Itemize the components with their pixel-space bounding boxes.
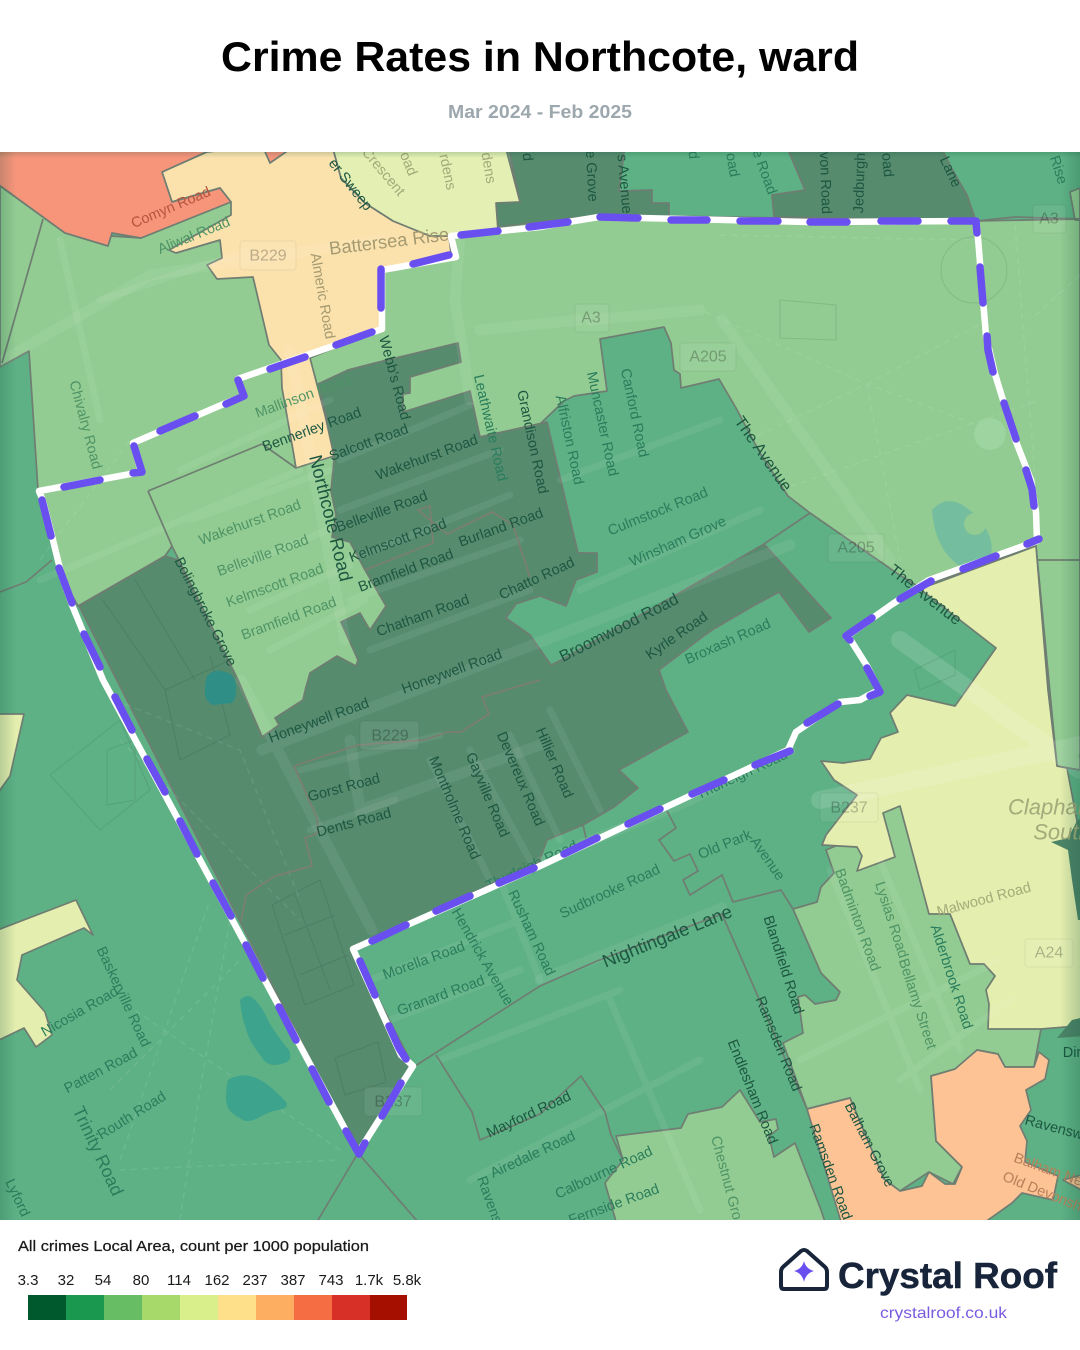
street name labels: Blandfield Road (760, 914, 806, 1016)
street name labels: Nicosia Road (39, 984, 121, 1040)
subtitle: date range: Mar 2024 - Feb 2025 (448, 101, 632, 122)
street name labels: Comyn Road (129, 184, 213, 232)
street name labels: Rise (1046, 154, 1070, 186)
area: pale yellow zones (0, 145, 1080, 1047)
street name labels: Northcote Road (305, 453, 357, 583)
street name labels: Winsham Grove (627, 514, 729, 570)
street name labels: The Avenue (731, 413, 795, 495)
legend value labels: 54 (95, 1272, 111, 1289)
road number signs: B237 (374, 1094, 412, 1110)
street name labels: s Avenue (613, 154, 635, 214)
legend value labels: 80 (133, 1272, 149, 1289)
street name labels: Kyrle Road (643, 609, 711, 663)
legend value labels: 237 (242, 1272, 268, 1289)
legend value labels: 162 (204, 1272, 230, 1289)
street name labels: Nightingale Lane (599, 900, 735, 972)
area: dark green lowest-crime zones (79, 145, 976, 1153)
street name labels: Chatto Road (497, 555, 577, 603)
street name labels: Endlesham Road (724, 1037, 780, 1147)
street name labels: Ravens (473, 1174, 505, 1226)
street name labels: rdens (435, 153, 459, 191)
street name labels: Montholme Road (425, 754, 483, 862)
street name labels: Alfriston Road (552, 394, 586, 486)
street name labels: Baskerville Road (93, 944, 153, 1050)
street name labels: Chivalry Road (65, 379, 105, 471)
street name labels: Wakehurst Road (197, 497, 303, 549)
street name labels: Trinity Road (69, 1103, 127, 1199)
street name labels: Chestnut Gro (707, 1134, 745, 1222)
street name labels: oad (396, 150, 420, 178)
road number signs: A205 (689, 348, 727, 366)
street name labels: Wakehurst Road (374, 432, 480, 484)
ward boundary: white line with purple dashes (39, 217, 1039, 1154)
street name labels: Bolingbroke Grove (171, 555, 239, 669)
street name labels: The Avenue (885, 561, 965, 629)
road network (0, 235, 1080, 1210)
street name labels: Balham Grove (841, 1100, 897, 1190)
ponds (205, 418, 1006, 1121)
road number signs: A24 (1035, 944, 1063, 962)
website: crystalroof.co.uk (880, 1305, 1008, 1322)
street name labels: Lyford (1, 1177, 33, 1219)
street name labels: Mallinson Road (253, 372, 353, 422)
street name labels: Honeywell Road (400, 646, 504, 698)
street name labels: Culmstock Road (606, 485, 710, 539)
road number signs: B229 (249, 248, 287, 264)
street name labels: er Sweep (325, 156, 375, 214)
legend value labels: 32 (58, 1272, 74, 1289)
street name labels: Canford Road (617, 367, 651, 459)
street name labels: Ramsden Road (752, 994, 804, 1094)
street name labels: Avenue (746, 834, 788, 884)
street name labels: Kelmscott Road (347, 516, 449, 566)
street name labels: Kelmscott Road (224, 561, 326, 611)
street name labels: Hillier Road (532, 725, 576, 801)
street name labels: Granard Road (395, 973, 487, 1019)
street name labels: von Road (816, 152, 834, 214)
street name labels: Jedburgh (851, 153, 869, 213)
street name labels: Alderbrook Road (927, 923, 975, 1031)
street name labels: Calbourne Road (553, 1143, 655, 1203)
street name labels: Crescent (358, 145, 408, 199)
street name labels: Hendrick Avenue (448, 906, 516, 1008)
internal boundary lines (0, 217, 1080, 1230)
street name labels: e Road (748, 147, 780, 197)
area: peach higher-crime zones (807, 1050, 1080, 1225)
street name labels: Burland Road (457, 505, 545, 551)
edge vignette (0, 152, 1080, 1220)
legend title: All crimes Local Area, count per 1000 population (18, 1238, 369, 1255)
road number signs: B237 (830, 800, 868, 816)
street name labels: d (519, 152, 535, 162)
street name labels: Mayford Road (484, 1089, 574, 1141)
street name labels: Gorst Road (306, 771, 382, 805)
street name labels: d (685, 150, 701, 160)
legend value labels: 3.3 (18, 1272, 38, 1289)
street name labels: Patten Road (62, 1045, 140, 1097)
street name labels: oad (722, 152, 742, 178)
street name labels: Morella Road (381, 939, 467, 983)
street name labels: Rusham Road (504, 888, 558, 978)
street name labels: Leathwaite Road (470, 373, 510, 483)
street name labels: Gayville Road (462, 750, 512, 840)
legend value labels: 743 (318, 1272, 344, 1289)
street name labels: Airedale Road (488, 1128, 578, 1182)
street name labels: Bellamy Street (895, 957, 939, 1051)
street name labels: Lane (936, 154, 964, 190)
street name labels: Lysias Road (871, 880, 911, 960)
street name labels: Webb's Road (375, 334, 413, 422)
street name labels: Thurleigh Road (694, 747, 790, 803)
street name labels: dens (477, 151, 499, 185)
street name labels: Ramsden Road (805, 1122, 855, 1222)
street name labels: oad (878, 152, 896, 178)
area: light green low-crime zones (0, 181, 1080, 1225)
street name labels: Routh Road (95, 1089, 169, 1143)
street name labels: Battersea Rise (328, 223, 450, 259)
street name labels: rie Grove (581, 142, 601, 202)
street name labels: Broxash Road (683, 616, 773, 668)
area: tan mid-crime zone along Northcote Road (162, 145, 451, 468)
street name labels: Old Park (696, 827, 755, 863)
street name labels: Grandison Road (513, 389, 551, 495)
building outlines (50, 237, 1007, 1095)
street name labels: Broomwood Road (556, 590, 682, 666)
legend (18, 1238, 422, 1320)
icon: house with star (781, 1250, 827, 1289)
area: salmon high-crime zone (0, 145, 296, 246)
street name labels: Salcott Road (327, 421, 411, 465)
street name labels: Bramfield Road (239, 594, 339, 644)
street name labels: Devereux Road (493, 730, 547, 828)
street name labels: Chatham Road (374, 592, 472, 640)
street name labels: Bennerley Road (260, 405, 364, 455)
road number signs: A3 (581, 310, 601, 326)
legend value labels (18, 1272, 422, 1289)
legend value labels: 114 (167, 1272, 191, 1289)
title: Crime Rates in Northcote, ward (221, 33, 859, 80)
road number signs: A3 (1039, 210, 1059, 228)
street name labels: Honeywell Road (267, 695, 371, 747)
logo: Crystal Roof (781, 1250, 1058, 1322)
legend value labels: 1.7k (355, 1272, 384, 1289)
street name labels: Badminton Road (831, 867, 883, 973)
street name labels: Sudbrooke Road (557, 862, 663, 922)
road number signs (240, 205, 1073, 1116)
street name labels: Belleville Road (215, 532, 311, 580)
street name labels: Muncaster Road (583, 370, 621, 478)
brand name: Crystal Roof (838, 1255, 1058, 1296)
street name labels: Aliwal Road (156, 214, 232, 258)
street name labels: Dents Road (315, 805, 393, 841)
street name labels: Belleville Road (334, 488, 430, 536)
legend colour scale (28, 1295, 407, 1320)
road number signs: B229 (371, 728, 409, 744)
road number signs: A205 (837, 540, 875, 556)
street name labels: Fernside Road (567, 1181, 661, 1229)
street name labels: Almeric Road (307, 252, 337, 340)
legend value labels: 5.8k (393, 1272, 422, 1289)
area: dark green patches at Clapham South (1051, 815, 1080, 1038)
street name labels: Malwood Road (935, 880, 1033, 920)
street name labels: Thurleigh Road (484, 838, 580, 894)
street name labels: Bramfield Road (356, 546, 456, 596)
common footpaths (40, 225, 1080, 1220)
legend value labels: 387 (280, 1272, 306, 1289)
